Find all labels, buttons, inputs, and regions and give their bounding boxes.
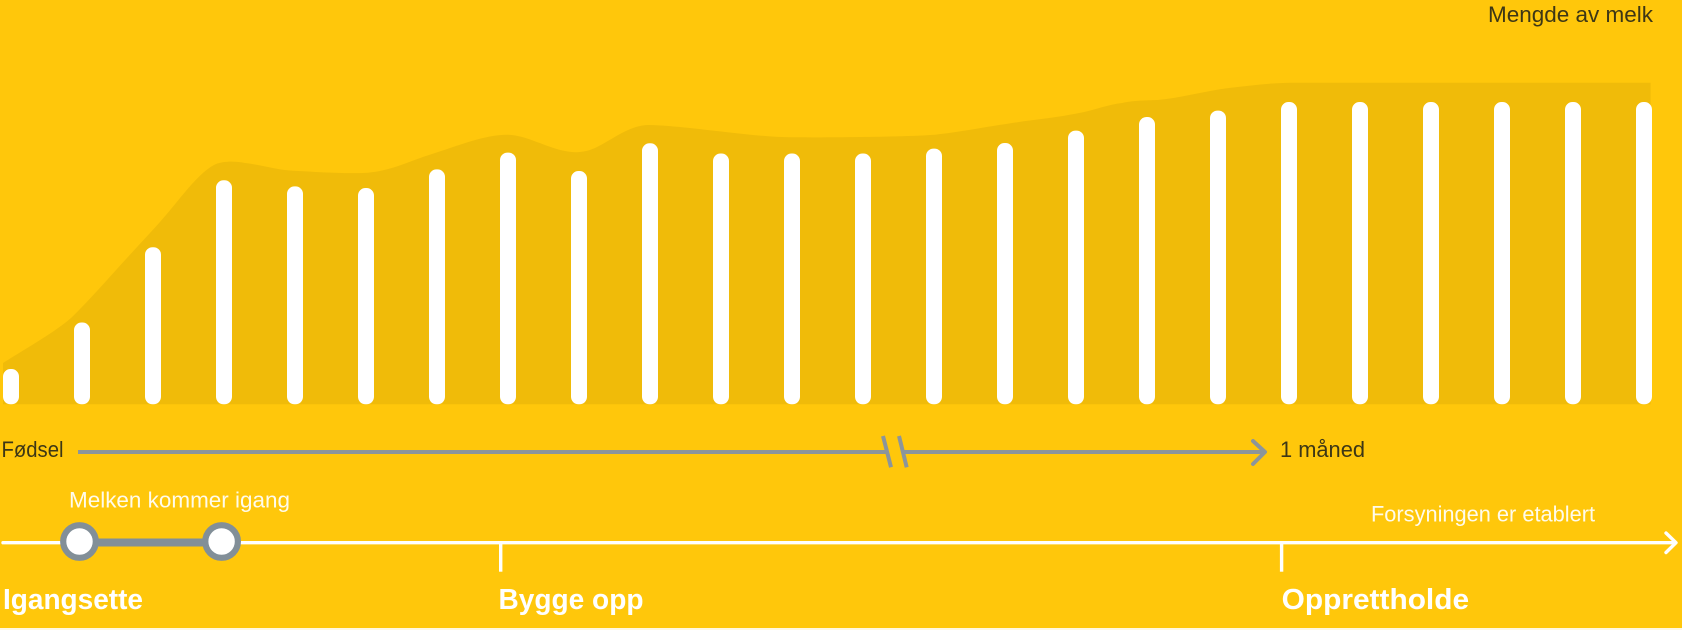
marker: milk coming in interval: [63, 525, 238, 558]
arrow: time axis with break: [78, 436, 1265, 467]
time label: Fødsel: Fødsel: [2, 437, 64, 462]
area chart: milk amount: [3, 83, 1651, 404]
phase heading: Opprettholde: Opprettholde: [1282, 584, 1469, 616]
callout: Forsyningen er etablert: Forsyningen er etablert: [1371, 502, 1595, 527]
phase heading: Igangsette: Igangsette: [3, 584, 143, 616]
callout: Melken kommer igang: Melken kommer igang: [69, 488, 290, 512]
arrow: phase timeline: [3, 533, 1676, 572]
time label: 1 måned: 1 måned: [1280, 437, 1365, 462]
phase heading: Bygge opp: Bygge opp: [498, 584, 644, 616]
bar chart: daily milk bars: [3, 102, 1652, 404]
y axis label: Mengde av melk: Mengde av melk: [1488, 2, 1654, 27]
